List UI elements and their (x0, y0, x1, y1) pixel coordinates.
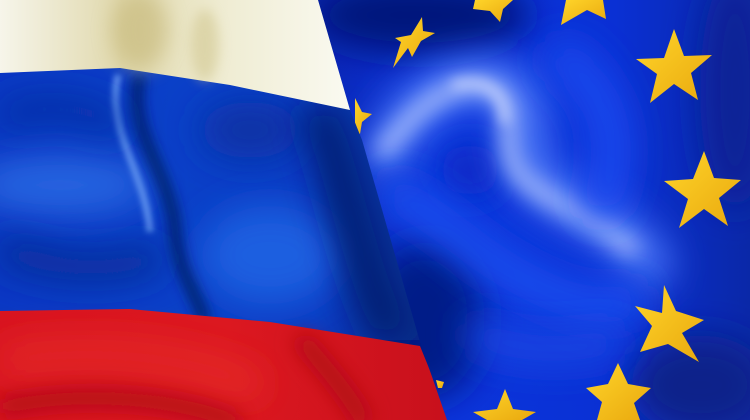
Russian flag red band (0, 309, 450, 420)
EU flag stars (355, 0, 741, 420)
panel: EU flag (300, 0, 750, 420)
Russian flag white band (0, 0, 370, 114)
EU flag bright swirl (385, 60, 650, 349)
Russian flag blue band (0, 68, 420, 340)
Russian flag blue folds (0, 75, 395, 340)
EU flag dark folds (310, 0, 750, 420)
panel: Russian flag (0, 0, 450, 420)
